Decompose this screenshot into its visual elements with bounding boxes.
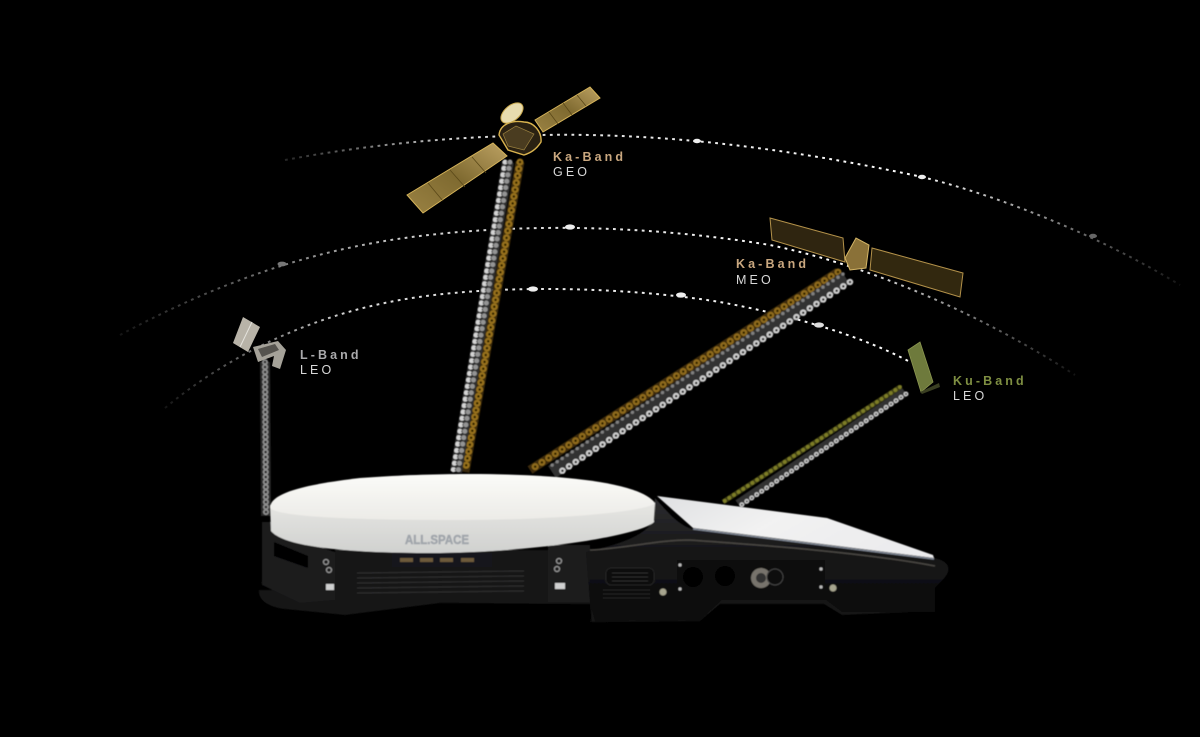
solar panel left — [770, 218, 845, 262]
solar panel right — [535, 87, 600, 132]
arm housing — [586, 498, 948, 621]
satellite: L-Band LEO — [233, 317, 286, 369]
satellite: Ka-Band GEO — [407, 87, 600, 213]
orbit: LEO — [165, 286, 910, 408]
label: Ka-Band MEO: Ka-Band — [736, 257, 809, 271]
terminal: ALL.SPACE hardware — [259, 474, 948, 622]
beam: L-Band LEO — [265, 362, 266, 516]
left module — [262, 522, 335, 603]
dome top — [270, 474, 655, 520]
orbit: GEO — [285, 135, 1180, 285]
satellite: Ka-Band MEO — [770, 218, 963, 297]
side vent — [603, 568, 654, 598]
beam: Ka-Band GEO — [453, 162, 520, 472]
front panel — [335, 550, 548, 603]
dome side — [270, 503, 655, 553]
white flat panel — [657, 496, 934, 558]
satellite body — [845, 238, 869, 270]
beam: Ka-Band MEO — [530, 272, 850, 475]
connector plate — [677, 560, 825, 592]
dish — [497, 99, 527, 127]
label: Ku-Band LEO — [953, 374, 1027, 403]
label: Ka-Band GEO: Ka-Band — [553, 150, 626, 164]
beam: Ku-Band LEO — [723, 387, 906, 506]
label: Ka-Band MEO: MEO — [736, 273, 774, 287]
label: Ku-Band LEO: Ku-Band — [953, 374, 1027, 388]
label: L-Band LEO: L-Band — [300, 348, 362, 362]
status lights — [400, 558, 474, 562]
orbit: MEO — [120, 224, 1075, 375]
vent — [357, 571, 524, 593]
base rail — [259, 580, 935, 622]
label: Ka-Band GEO: GEO — [553, 165, 590, 179]
ports — [660, 563, 836, 596]
satellite: Ku-Band LEO — [908, 342, 940, 394]
side module — [548, 545, 590, 602]
label: Ka-Band MEO — [736, 257, 809, 287]
label: L-Band LEO — [300, 348, 362, 377]
label: Ku-Band LEO: LEO — [953, 389, 987, 403]
solar panel left — [407, 143, 507, 213]
solar panel right — [870, 248, 963, 297]
satellite body — [499, 122, 541, 155]
label: Ka-Band GEO — [553, 150, 626, 179]
logo: ALL.SPACE — [405, 533, 469, 547]
label: L-Band LEO: LEO — [300, 363, 334, 377]
